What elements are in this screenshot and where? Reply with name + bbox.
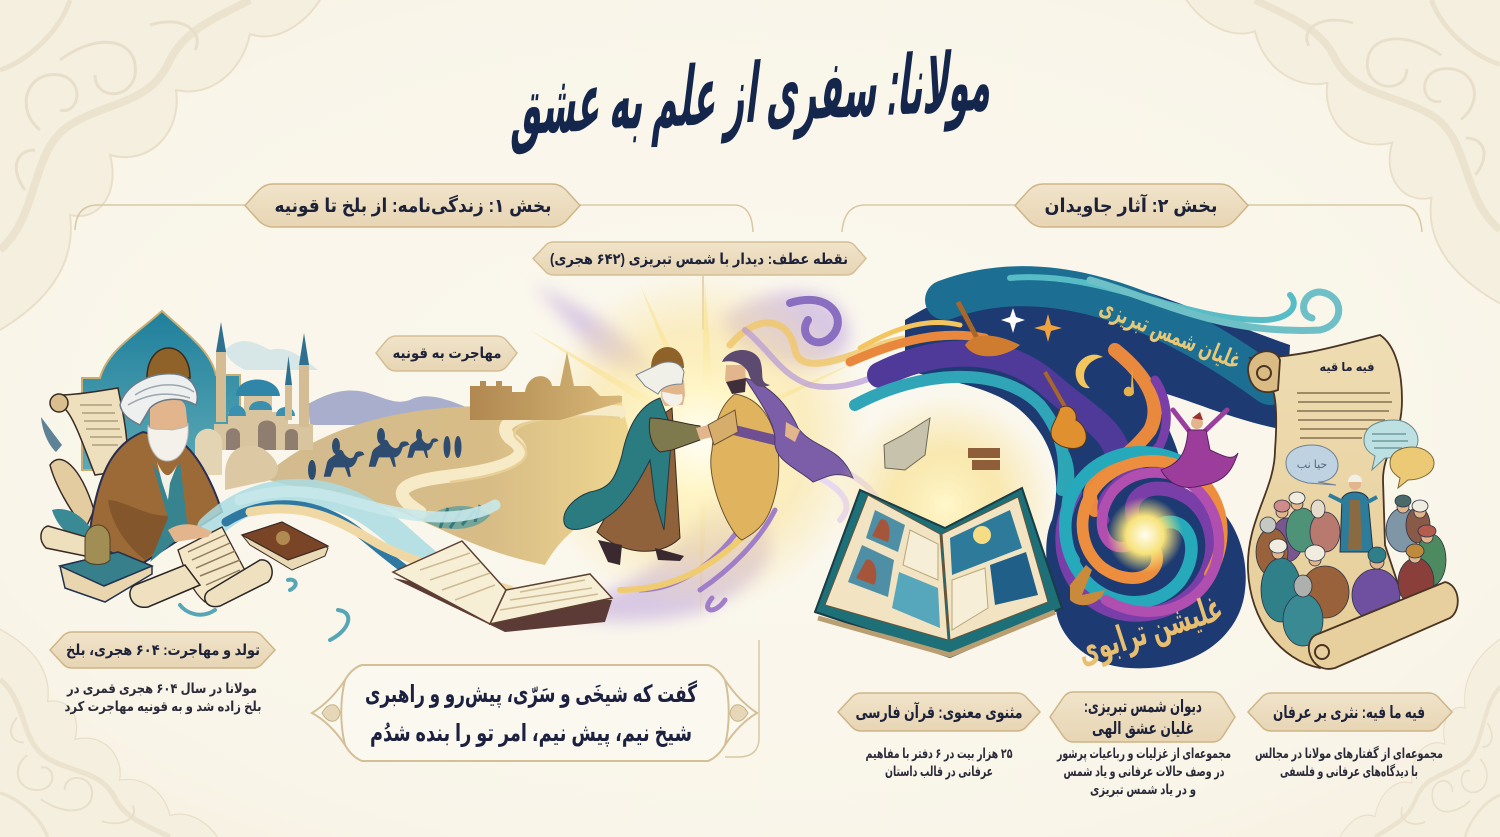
arm	[649, 418, 700, 452]
work: Fihi ma fihi	[1248, 693, 1452, 779]
work: Divan: غلیان عشق الهی	[1092, 719, 1194, 739]
speaker	[1329, 474, 1377, 552]
hat	[147, 348, 190, 378]
cloak	[564, 398, 672, 530]
calligraphy bottom: غلیشن ترابوی	[1072, 587, 1228, 673]
birth and migration card: تولد و مهاجرت: ۶۰۴ هجری، بلخ	[66, 642, 260, 659]
milestone: migration to Konya	[376, 336, 517, 371]
central light burst	[530, 270, 870, 622]
parchment scroll	[1248, 335, 1458, 669]
quote text: شیخ نیم، پیش نیم، امر تو را بنده شدُم	[370, 720, 692, 747]
Divan description: و در یاد شمس تبریزی	[1090, 782, 1196, 797]
ribbons	[850, 277, 1294, 560]
work: Fihi ma fihi: فیه ما فیه: نثری بر عرفان	[1273, 703, 1425, 723]
face	[150, 397, 188, 444]
boots	[598, 540, 684, 565]
speech bubbles	[1286, 420, 1434, 488]
scroll writing lines	[1297, 393, 1392, 438]
birth description: مولانا در سال ۶۰۴ هجری قمری در	[66, 681, 257, 696]
ink pot	[85, 525, 110, 564]
calligraphy top: غلیان شمس تبریزی	[1096, 294, 1245, 375]
section 1 heading: بخش ۱: زندگی‌نامه: از بلخ تا قونیه	[274, 194, 552, 217]
sash	[733, 425, 780, 446]
long hair	[722, 350, 770, 387]
Divan description: در وصف حالات عرفانی و یاد شمس	[1064, 764, 1225, 779]
hand	[785, 422, 800, 442]
purple cloak	[745, 378, 853, 482]
right page panels	[950, 510, 1022, 575]
winding road	[402, 410, 620, 512]
Masnavi description: عرفانی در قالب داستان	[885, 764, 993, 779]
scroll heading: فیه ما قیه	[1320, 360, 1374, 374]
milestone: turning point: نقطه عطف: دیدار با شمس تبریزی (۶۴۲ هجری)	[550, 251, 848, 268]
work: Masnavi	[838, 693, 1040, 779]
camel caravan	[308, 428, 462, 480]
left page panels	[848, 510, 905, 597]
birth and migration card	[50, 632, 275, 714]
Fihi ma fihi description: با دیدگاه‌های عرفانی و فلسفی	[1280, 763, 1418, 779]
work: Divan: دیوان شمس تبریزی:	[1084, 697, 1202, 717]
teal cover	[815, 488, 1062, 657]
cosmic swirl	[835, 277, 1294, 673]
big open book	[815, 488, 1062, 657]
corner ornament top left	[0, 0, 320, 330]
flowing water ribbon	[180, 491, 540, 640]
turban	[120, 374, 197, 425]
swirling wisps	[620, 300, 945, 610]
section 1 frame line	[75, 205, 759, 757]
arch panel	[82, 311, 240, 470]
robe	[90, 432, 222, 565]
section 2 frame line	[842, 205, 1422, 232]
section 2 heading	[1015, 184, 1248, 227]
pages	[825, 495, 948, 640]
left illustration: Rumi writing	[41, 311, 640, 602]
Divan description	[1056, 746, 1231, 797]
oasis pond and plants	[423, 506, 490, 529]
desert land	[262, 395, 640, 565]
figure: Rumi meeting Shams	[564, 347, 716, 565]
birth description	[64, 681, 262, 714]
Divan description: مجموعه‌ای از غزلیات و رباعیات پرشور	[1056, 746, 1231, 761]
speech bubbles: حیا نب	[1297, 459, 1327, 471]
corner ornament bottom left	[0, 629, 218, 837]
birth description: بلخ زاده شد و به قونیه مهاجرت کرد	[64, 699, 262, 714]
quote text: گفت که شیخَی و سَرّی، پیش‌رو و راهبری	[365, 680, 697, 708]
section 2 heading: بخش ۲: آثار جاویدان	[1044, 193, 1218, 217]
top roll	[1248, 351, 1280, 392]
golden robe	[711, 394, 779, 540]
mosque	[195, 322, 313, 490]
hat and turban	[651, 347, 684, 368]
open book	[393, 541, 612, 632]
teal swirl decoration	[1090, 280, 1339, 330]
face and beard	[661, 380, 685, 406]
floating books	[884, 418, 1000, 470]
page edge	[818, 612, 1055, 655]
castle	[470, 352, 622, 420]
navy body	[905, 278, 1290, 668]
horizontal roll	[41, 526, 112, 557]
corner ornament bottom right	[1340, 639, 1500, 837]
guitar	[1045, 372, 1086, 448]
writing scroll and brown book	[130, 522, 328, 607]
milestone: turning point	[533, 242, 866, 275]
corner ornament top right	[1186, 0, 1500, 304]
beard	[148, 424, 188, 461]
stars	[1001, 308, 1025, 333]
cloud	[225, 341, 318, 370]
figure: Shams	[708, 350, 853, 540]
crescent moon	[1076, 355, 1103, 388]
quote box	[312, 665, 757, 761]
audience	[1256, 492, 1446, 646]
handshake	[696, 424, 716, 440]
work: Masnavi: مثنوی معنوی: قرآن فارسی	[856, 701, 1022, 723]
quill pen	[41, 417, 62, 452]
face	[725, 365, 746, 392]
spiral	[1062, 452, 1222, 615]
work: Divan	[1050, 692, 1235, 797]
horn	[1070, 565, 1105, 605]
teal book	[60, 552, 152, 602]
Fihi ma fihi description	[1255, 745, 1443, 779]
rolled scroll	[50, 459, 94, 530]
Masnavi description: ۲۵ هزار بیت در ۶ دفتر با مفاهیم	[866, 746, 1012, 761]
dervish	[1161, 410, 1238, 487]
inner teal garment	[150, 462, 188, 562]
bottom roll	[1309, 582, 1458, 669]
light rays behind book	[835, 395, 1055, 615]
milestone: migration to Konya: مهاجرت به قونیه	[392, 345, 502, 362]
section 1 heading	[245, 184, 580, 227]
back scroll	[60, 388, 128, 475]
music note	[1124, 368, 1134, 396]
teal leaves	[52, 509, 96, 540]
robe	[597, 408, 680, 551]
quote text	[365, 680, 697, 747]
mountains	[308, 390, 470, 425]
Masnavi description	[866, 746, 1012, 779]
tan arm	[708, 410, 738, 445]
lute	[958, 302, 1020, 356]
